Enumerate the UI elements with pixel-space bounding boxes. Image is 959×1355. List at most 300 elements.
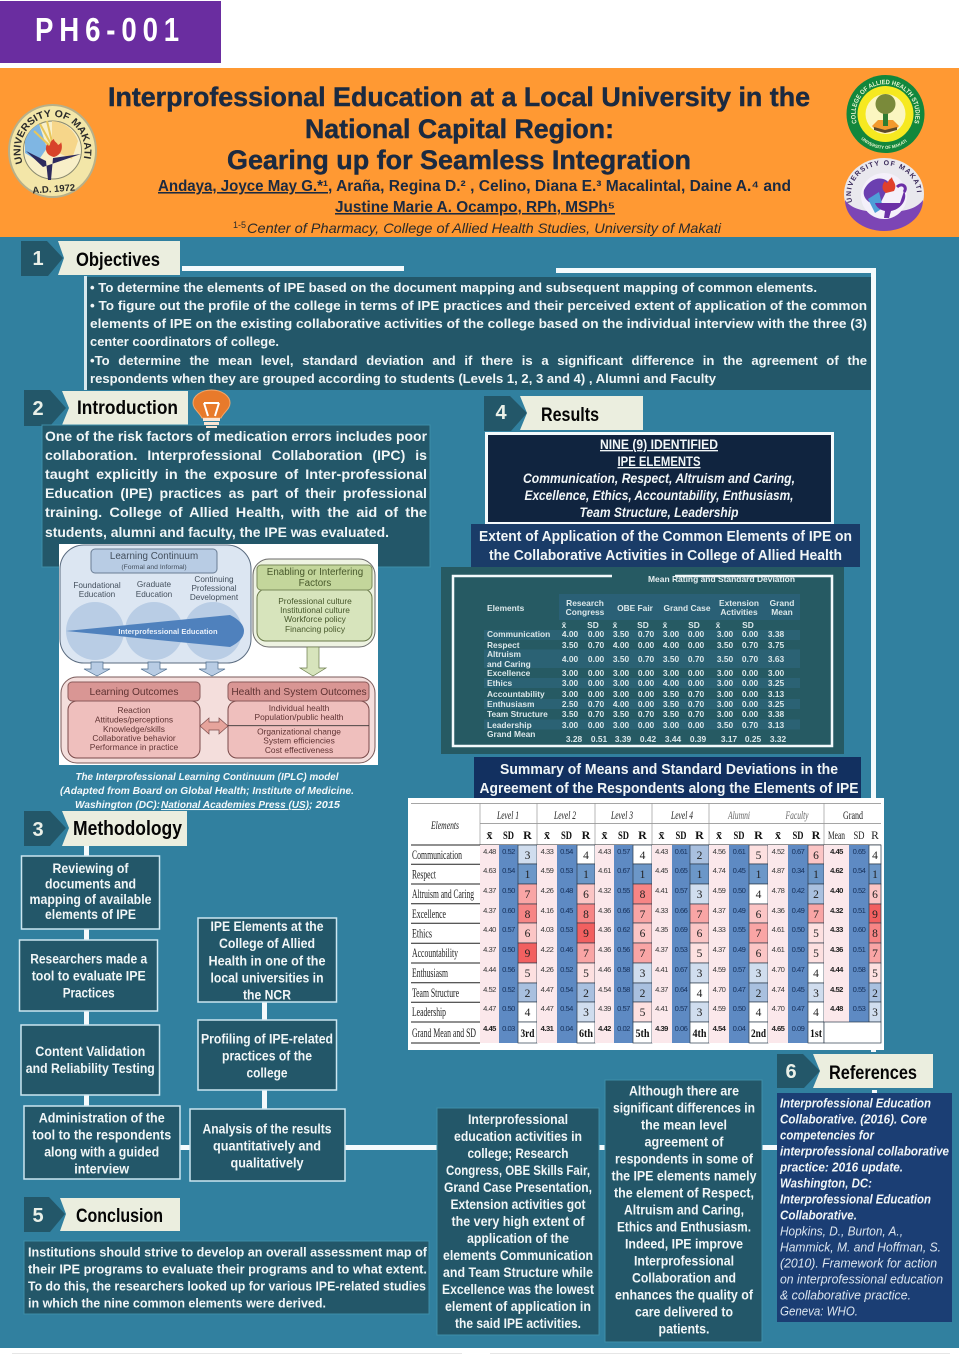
- column group: Alumni: 0.50: [733, 886, 746, 895]
- column group: Level 1: 0.52: [502, 985, 515, 994]
- row labels: Communication: [412, 848, 462, 862]
- column group: Level 1: 3rd: [520, 1026, 535, 1040]
- column group: Faculty: 2: [813, 889, 819, 901]
- column group: Faculty: 3: [813, 988, 819, 1000]
- column group: Alumni: 4.59: [713, 886, 726, 895]
- table: mean rating and standard deviation: 3.28: [566, 734, 582, 744]
- table header: x̄: [658, 828, 664, 842]
- panel: significant differences finding: respondents in some of: [615, 1152, 753, 1166]
- panel: extent of IPE activities finding: Grand Case Presentation,: [444, 1180, 592, 1195]
- panel: outcomes: Learning Outcomes: [90, 687, 178, 698]
- section 2 heading: Introduction: Introduction: [77, 398, 178, 419]
- table: mean rating and standard deviation: 3.44: [665, 734, 681, 744]
- column group: Faculty: 5: [813, 948, 819, 960]
- table header: x̄: [544, 828, 550, 842]
- panel: learning continuum: Education: [79, 590, 116, 599]
- table header: Level 3: [610, 810, 633, 822]
- column group: Level 4: 4.33: [655, 906, 668, 915]
- column group: Level 3: 0.58: [617, 965, 630, 974]
- table: mean rating and standard deviation: 3.00: [562, 678, 578, 688]
- panel: significant differences finding: Although there are: [629, 1084, 739, 1098]
- column group: Faculty: 0.47: [792, 1004, 805, 1013]
- column group: Level 4: 1: [697, 869, 703, 881]
- column group: Level 1: 0.50: [502, 945, 515, 954]
- column group: Level 4: 4.45: [655, 866, 668, 875]
- column group: Alumni: [709, 845, 768, 1043]
- column group: Level 3: 2: [640, 988, 646, 1000]
- methodology step: profiling of practices: college: [246, 1066, 288, 1080]
- column group: Level 1: 4.45: [483, 1024, 497, 1033]
- column group: Level 3: 4.54: [598, 985, 611, 994]
- table: mean rating and standard deviation: 3.50: [613, 654, 629, 664]
- methodology step: analysis of results: Analysis of the results: [202, 1122, 332, 1136]
- column group: Level 4: 0.57: [675, 1004, 688, 1013]
- panel: extent of IPE activities finding: Interprofessional: [468, 1112, 568, 1127]
- column group: Faculty: 5: [813, 928, 819, 940]
- column group: Level 2: 2: [583, 988, 589, 1000]
- panel: significant differences finding: Altruism and Caring,: [624, 1202, 744, 1218]
- table: mean rating and standard deviation: 0.00: [638, 678, 654, 688]
- table: mean rating and standard deviation: 0.70: [688, 709, 704, 719]
- panel: conclusion text: in which the nine common elements were derived.: [28, 1296, 326, 1310]
- column group: Faculty: 0.50: [792, 925, 805, 934]
- column group: Level 4: 0.06: [675, 1024, 688, 1033]
- table header: Level 2: [553, 810, 576, 822]
- methodology step: content validation: [21, 1025, 160, 1095]
- table: mean rating and standard deviation: 3.00: [562, 720, 578, 730]
- panel: significant differences finding: the mean level: [641, 1118, 727, 1132]
- column group: Faculty: 0.45: [792, 985, 805, 994]
- panel: references list: interprofessional collaborative: [780, 1144, 949, 1158]
- table: mean rating and standard deviation: 0.00: [742, 668, 758, 678]
- table: mean rating and standard deviation: 3.13: [768, 689, 784, 699]
- table: mean rating and standard deviation: 3.00: [717, 678, 733, 688]
- table: mean rating and standard deviation: 0.70: [688, 654, 704, 664]
- section 1 heading: Objectives: 1: [32, 248, 44, 270]
- table: mean rating and standard deviation: 3.00: [613, 720, 629, 730]
- connector lines: [84, 266, 877, 1150]
- table: mean rating and standard deviation: 0.70: [588, 709, 604, 719]
- table: mean rating and standard deviation: 3.50: [663, 709, 679, 719]
- column group: Level 4: 4.43: [655, 847, 668, 856]
- panel: learning continuum: Development: [190, 593, 239, 602]
- column group: Faculty: 4.70: [772, 965, 785, 974]
- column group: Level 4: 5: [697, 948, 703, 960]
- table: mean rating and standard deviation: 0.70: [588, 699, 604, 709]
- table: mean rating and standard deviation: Communication: [487, 629, 550, 639]
- panel: extent of IPE activities finding: the said IPE activities.: [455, 1316, 581, 1331]
- column group: Level 1: 4.40: [483, 925, 496, 934]
- icon: University of Makati pharmacy seal: UNIVERSITY OF MAKATI: [846, 160, 922, 203]
- column group: Level 4: 0.66: [675, 906, 688, 915]
- column group: Level 2: 0.54: [560, 985, 573, 994]
- table: mean rating and standard deviation: 4.00: [562, 654, 578, 664]
- methodology step: IPE elements at the college: [198, 918, 336, 1002]
- column group: Level 1: 4.52: [483, 985, 496, 994]
- table: mean rating and standard deviation: OBE Fair: [617, 603, 654, 613]
- column group: Level 2: 4.31: [541, 1024, 555, 1033]
- section 6 heading: References: 6: [785, 1061, 797, 1083]
- panel: significant differences finding: patients.: [658, 1322, 710, 1336]
- panel: extent of IPE activities finding: Congress, OBE Skills Fair,: [446, 1163, 590, 1178]
- table: mean rating and standard deviation: 0.00: [742, 699, 758, 709]
- column group: Level 4: 0.64: [675, 985, 688, 994]
- heading: extent of application: the Collaborative Activities in College of Allied Health: [489, 548, 842, 564]
- column group: Faculty: 0.34: [792, 866, 805, 875]
- column group: Level 4: 0.65: [675, 866, 688, 875]
- table: mean rating and standard deviation: 3.39: [615, 734, 631, 744]
- table: mean rating and standard deviation: and Caring: [487, 659, 531, 669]
- section 3 heading: Methodology: 3: [32, 819, 44, 841]
- column group: Alumni: 5: [756, 850, 762, 862]
- table header: SD: [503, 828, 514, 842]
- column group: Level 1: 0.56: [502, 965, 515, 974]
- table header: R: [812, 828, 821, 842]
- table: mean rating and standard deviation: Mean: [771, 607, 793, 617]
- column group: Level 3: 0.62: [617, 925, 630, 934]
- table: mean rating and standard deviation: 3.13: [768, 720, 784, 730]
- panel: outcomes: Population/public health: [255, 712, 344, 722]
- column group: Alumni: 4.70: [713, 985, 726, 994]
- column group: Grand: 0.55: [853, 985, 866, 994]
- table: mean rating and standard deviation: 0.70: [742, 720, 758, 730]
- table header: SD: [676, 828, 687, 842]
- table: mean rating and standard deviation: 4.00: [663, 678, 679, 688]
- column group: Grand: 0.54: [853, 866, 866, 875]
- column group: Level 2: 0.04: [560, 1024, 573, 1033]
- column group: Faculty: 0.47: [792, 965, 805, 974]
- column group: Grand: 0.60: [853, 925, 866, 934]
- panel: extent of IPE activities finding: education activities in: [454, 1129, 582, 1144]
- table header: R: [695, 828, 704, 842]
- heading: extent of application: [471, 524, 860, 567]
- header banner: [0, 68, 959, 237]
- column group: Grand: 4.48: [830, 1004, 843, 1013]
- column group: Level 2: 4.47: [541, 1004, 554, 1013]
- diagram caption: Washington (DC):: [75, 799, 160, 811]
- methodology step: researchers made a tool: [20, 940, 158, 1011]
- title: National Capital Region:: [305, 114, 614, 144]
- table: mean rating and standard deviation: 3.50: [562, 709, 578, 719]
- column group: Level 1: [480, 845, 537, 1043]
- column group: Level 4: 4: [697, 988, 703, 1000]
- section 5 heading: Conclusion: Conclusion: [76, 1206, 163, 1227]
- column group: Grand: 4.44: [830, 965, 844, 974]
- column group: Faculty: 0.09: [792, 1024, 805, 1033]
- panel: enabling or interfering factors: Workforce policy: [284, 614, 347, 624]
- column group: Level 3: 0.66: [617, 906, 630, 915]
- panel: significant differences finding: Indeed, IPE improve: [625, 1236, 743, 1252]
- column group: Faculty: 4.87: [772, 866, 785, 875]
- panel: objectives text: • To determine the elements of IPE based on the document mapping and subsequent mapping of common elements.: [90, 280, 817, 295]
- table: mean rating and standard deviation: 0.00: [638, 720, 654, 730]
- table: mean rating and standard deviation: 0.39: [690, 734, 706, 744]
- authors: Justine Marie A. Ocampo, RPh, MSPh⁵: [335, 199, 615, 216]
- table: mean rating and standard deviation: 3.00: [663, 720, 679, 730]
- panel: references list: Hopkins, D., Burton, A.,: [780, 1224, 903, 1238]
- column group: Alumni: 6: [756, 909, 762, 921]
- column group: Level 1: 0.60: [502, 906, 515, 915]
- heading: summary of means: Agreement of the Respondents along the Elements of IPE: [480, 781, 859, 797]
- panel: learning continuum: [60, 545, 251, 663]
- table: mean rating and standard deviation: 0.70: [638, 654, 654, 664]
- panel: objectives text: [84, 276, 871, 390]
- panel: outcomes: Organizational change: [257, 726, 341, 736]
- section 4 heading: Results: 4: [495, 402, 507, 424]
- column group: Alumni: 2: [756, 988, 762, 1000]
- table: mean rating and standard deviation: 0.00: [742, 629, 758, 639]
- arrows down to outcomes: [84, 647, 326, 676]
- column group: Alumni: 0.04: [733, 1024, 746, 1033]
- column group: Level 1: 5: [525, 968, 531, 980]
- heading: summary of means: [474, 757, 861, 798]
- column group: Level 2: 1: [583, 869, 589, 881]
- methodology step: profiling of practices: practices of the: [222, 1048, 312, 1064]
- table: mean rating and standard deviation: 3.25: [768, 699, 784, 709]
- column group: Faculty: 4.52: [772, 847, 785, 856]
- icon: College of Allied Health Studies seal: COLLEGE OF ALLIED HEALTH STUDIES: [851, 80, 920, 124]
- column group: Level 1: 7: [525, 889, 531, 901]
- icon: University of Makati seal: A.D. 1972: [32, 183, 76, 196]
- column group: Level 4: 3: [697, 889, 703, 901]
- column group: Grand: 0.53: [853, 1004, 866, 1013]
- table: mean rating and standard deviation: SD: [587, 620, 599, 630]
- table header: SD: [561, 828, 572, 842]
- table header: R: [582, 828, 591, 842]
- table: mean rating and standard deviation: 3.50: [663, 654, 679, 664]
- panel: nine identified IPE elements: Team Structure, Leadership: [580, 505, 738, 520]
- column group: Level 1: 2: [525, 988, 531, 1000]
- table: mean rating and standard deviation: 0.70: [638, 629, 654, 639]
- column group: Level 2: 4.26: [541, 886, 554, 895]
- section 4 heading: Results: [484, 396, 643, 431]
- panel: objectives text: respondents when they are grouped according to students (Levels 1, 2, 3 and 4) , Alumni and Faculty: [90, 371, 717, 386]
- column group: Level 3: 4.36: [598, 925, 611, 934]
- column group: Level 1: 4.37: [483, 945, 496, 954]
- panel: enabling or interfering factors: Factors: [299, 578, 331, 589]
- table: mean rating and standard deviation: 0.00: [638, 689, 654, 699]
- column group: Alumni: 4.59: [713, 965, 726, 974]
- panel: significant differences finding: Collaboration and: [632, 1270, 736, 1286]
- panel: conclusion text: [24, 1241, 429, 1314]
- column group: Level 2: 4.16: [541, 906, 554, 915]
- methodology step: IPE elements at the college: College of Allied: [219, 936, 315, 951]
- methodology step: administration of the tool: interview: [74, 1162, 130, 1176]
- panel: objectives text: • To figure out the profile of the college in terms of IPE practices and their perceived extent of application of the common: [90, 298, 867, 313]
- column group: Faculty: 0.42: [792, 886, 805, 895]
- column group: Grand: 0.58: [853, 965, 866, 974]
- column group: Alumni: 6: [756, 948, 762, 960]
- table: mean rating and standard deviation: 3.25: [768, 678, 784, 688]
- table: mean rating and standard deviation: 0.00: [742, 709, 758, 719]
- table: mean rating and standard deviation: 0.70: [688, 699, 704, 709]
- table: mean rating and standard deviation: 3.32: [770, 734, 786, 744]
- column group: Grand: 1: [872, 869, 878, 881]
- column group: Alumni: 3: [756, 968, 762, 980]
- methodology step: reviewing of documents: mapping of available: [30, 892, 152, 907]
- table: mean rating and standard deviation: x̄: [716, 620, 721, 630]
- methodology step: administration of the tool: [24, 1106, 180, 1179]
- column group: Level 4: 4.35: [655, 925, 668, 934]
- table: mean rating and standard deviation: 4.00: [613, 640, 629, 650]
- column group: Grand: 0.52: [853, 886, 866, 895]
- panel: significant differences finding: [605, 1080, 762, 1342]
- column group: Faculty: 4.70: [772, 1004, 785, 1013]
- panel: outcomes: Attitudes/perceptions: [95, 714, 173, 724]
- section 2 heading: Introduction: [24, 390, 188, 426]
- panel: extent of IPE activities finding: [437, 1108, 599, 1335]
- column group: Level 4: 2: [697, 850, 703, 862]
- column group: Faculty: 4.61: [772, 945, 785, 954]
- panel: enabling or interfering factors: Professional culture: [278, 596, 352, 606]
- column group: Level 1: 4.44: [483, 965, 496, 974]
- column group: Level 4: 0.53: [675, 945, 688, 954]
- column group: Faculty: 1st: [810, 1026, 822, 1040]
- methodology step: analysis of results: qualitatively: [230, 1156, 304, 1170]
- row labels: [411, 845, 881, 1043]
- column group: Level 1: 4.37: [483, 906, 496, 915]
- table: mean rating and standard deviation: 3.50: [562, 640, 578, 650]
- panel: introduction text: [42, 425, 430, 567]
- table: mean rating and standard deviation: Mean Rating and Standard Deviation: [648, 574, 795, 584]
- panel: significant differences finding: agreement of: [644, 1134, 724, 1150]
- column group: Level 4: 0.61: [675, 847, 688, 856]
- column group: Level 3: 4.46: [598, 965, 611, 974]
- diagram caption: (Adapted from Board on Global Health; Institute of Medicine.: [60, 785, 354, 797]
- panel: outcomes: System efficiencies: [263, 736, 335, 746]
- column group: Level 3: 5: [640, 1007, 646, 1019]
- table: mean rating and standard deviation: 0.00: [638, 640, 654, 650]
- table: mean rating and standard deviation: 3.00: [663, 629, 679, 639]
- panel: introduction text: collaboration. Interprofessional Collaboration (IPC) is: [45, 447, 427, 463]
- panel: extent of IPE activities finding: college; Research: [468, 1146, 568, 1161]
- title: [108, 82, 810, 175]
- panel: references list: competencies for: [780, 1128, 875, 1142]
- column group: Alumni: 4.33: [713, 925, 726, 934]
- column group: Faculty: 4.61: [772, 925, 785, 934]
- table: mean rating and standard deviation: 3.00: [663, 668, 679, 678]
- table: mean rating and standard deviation: 3.17: [721, 734, 737, 744]
- table: mean rating and standard deviation: 3.00: [562, 668, 578, 678]
- table: mean rating and standard deviation: 3.00: [562, 689, 578, 699]
- column group: Level 4: 4.37: [655, 985, 668, 994]
- column group: Alumni: 0.55: [733, 925, 746, 934]
- authors: [158, 178, 791, 216]
- row labels: Grand Mean and SD: [412, 1026, 476, 1040]
- column group: Level 1: 3: [525, 850, 531, 862]
- section 5 heading: Conclusion: 5: [32, 1205, 44, 1227]
- column group: Level 2: 0.54: [560, 847, 573, 856]
- table: mean rating and standard deviation: 3.63: [768, 654, 784, 664]
- column group: Level 2: [537, 845, 595, 1043]
- panel: extent of IPE activities finding: the very high extent of: [452, 1214, 585, 1229]
- table: mean rating and standard deviation: 3.00: [613, 678, 629, 688]
- table: mean rating and standard deviation: 0.00: [638, 699, 654, 709]
- panel: outcomes: Knowledge/skills: [103, 724, 165, 734]
- column group: Alumni: 7: [756, 928, 762, 940]
- methodology step: profiling of practices: [198, 1020, 336, 1090]
- methodology step: researchers made a tool: Researchers made a: [30, 952, 148, 966]
- column group: Faculty: 4: [813, 1007, 819, 1019]
- table: mean rating and standard deviation: 0.00: [588, 668, 604, 678]
- diagram caption: The Interprofessional Learning Continuum (IPLC) model: [76, 771, 340, 783]
- panel: significant differences finding: the element of Respect,: [614, 1186, 754, 1200]
- panel: outcomes: Reaction: [117, 705, 151, 715]
- title: Interprofessional Education at a Local University in the: [108, 82, 810, 112]
- diagram: interprofessional learning continuum model: [59, 544, 378, 765]
- column group: Level 3: 6: [640, 928, 646, 940]
- table: mean rating and standard deviation: 3.00: [613, 689, 629, 699]
- row labels: Altruism and Caring: [412, 887, 474, 901]
- table: mean rating and standard deviation: 0.00: [588, 720, 604, 730]
- panel: references list: (2010). Framework for action: [780, 1256, 937, 1270]
- table header: Faculty: [785, 810, 809, 822]
- column group: Level 3: 1: [640, 869, 646, 881]
- panel: references list: [777, 1093, 952, 1322]
- table: mean rating and standard deviation: 0.00: [588, 689, 604, 699]
- table header: x̄: [602, 828, 608, 842]
- icon: College of Allied Health Studies seal: UNIVERSITY OF MAKATI: [862, 136, 907, 149]
- column group: Alumni: 0.45: [733, 866, 746, 875]
- column group: Grand: 0.65: [853, 847, 866, 856]
- table: mean rating and standard deviation: Grand: [770, 598, 794, 608]
- table: mean rating and standard deviation: 3.50: [717, 654, 733, 664]
- column group: Level 3: 0.55: [617, 886, 630, 895]
- column group: Faculty: [768, 845, 824, 1043]
- column group: Level 3: 4.36: [598, 906, 611, 915]
- panel: significant differences finding: Interprofessional: [634, 1254, 734, 1268]
- panel: introduction text: training. College of Allied Health, with the aid of the: [45, 504, 427, 520]
- column group: Alumni: 2nd: [751, 1026, 766, 1040]
- column group: Level 1: 4.63: [483, 866, 496, 875]
- panel: outcomes: Health and System Outcomes: [231, 687, 367, 698]
- methodology step: content validation: Content Validation: [35, 1044, 145, 1059]
- table: mean rating and standard deviation: Extension: [719, 598, 759, 608]
- column group: Alumni: 4.59: [713, 1004, 726, 1013]
- panel: extent of IPE activities finding: and Team Structure while: [443, 1265, 593, 1280]
- column group: Alumni: 4.56: [713, 847, 726, 856]
- row labels: Enthusiasm: [412, 966, 448, 980]
- panel: extent of IPE activities finding: Extension activities got: [450, 1197, 586, 1212]
- table header: R: [754, 828, 763, 842]
- panel: outcomes: [61, 677, 375, 763]
- panel: outcomes: Performance in practice: [90, 742, 179, 752]
- column group: Level 3: 7: [640, 909, 646, 921]
- column group: Level 1: 4.37: [483, 886, 496, 895]
- column group: Level 3: 4.61: [598, 866, 611, 875]
- panel: nine identified IPE elements: NINE (9) IDENTIFIED: [600, 437, 718, 452]
- table header: Alumni: [727, 810, 750, 822]
- column group: Level 3: 0.58: [617, 985, 630, 994]
- panel: outcomes: Collaborative behavior: [92, 733, 176, 743]
- column group: Faculty: 0.50: [792, 945, 805, 954]
- table: mean rating and standard deviation: 3.00: [717, 709, 733, 719]
- panel: significant differences finding: care delivered to: [635, 1304, 733, 1320]
- column group: Level 1: 4: [525, 1007, 531, 1019]
- table header: SD: [854, 830, 864, 842]
- column group: Grand: 4.45: [830, 847, 844, 856]
- panel: nine identified IPE elements: Excellence, Ethics, Accountability, Enthusiasm,: [524, 488, 794, 503]
- panel: outcomes: Cost effectiveness: [265, 745, 333, 755]
- row labels: Ethics: [412, 926, 432, 940]
- column group: Grand: [824, 845, 881, 1043]
- column group: Alumni: 4: [756, 889, 762, 901]
- column group: Alumni: 4.54: [713, 1024, 727, 1033]
- table: mean rating and standard deviation: SD: [637, 620, 649, 630]
- column group: Faculty: 4.36: [772, 906, 785, 915]
- table: mean rating and standard deviation: 0.70: [638, 709, 654, 719]
- column group: Faculty: 0.67: [792, 847, 805, 856]
